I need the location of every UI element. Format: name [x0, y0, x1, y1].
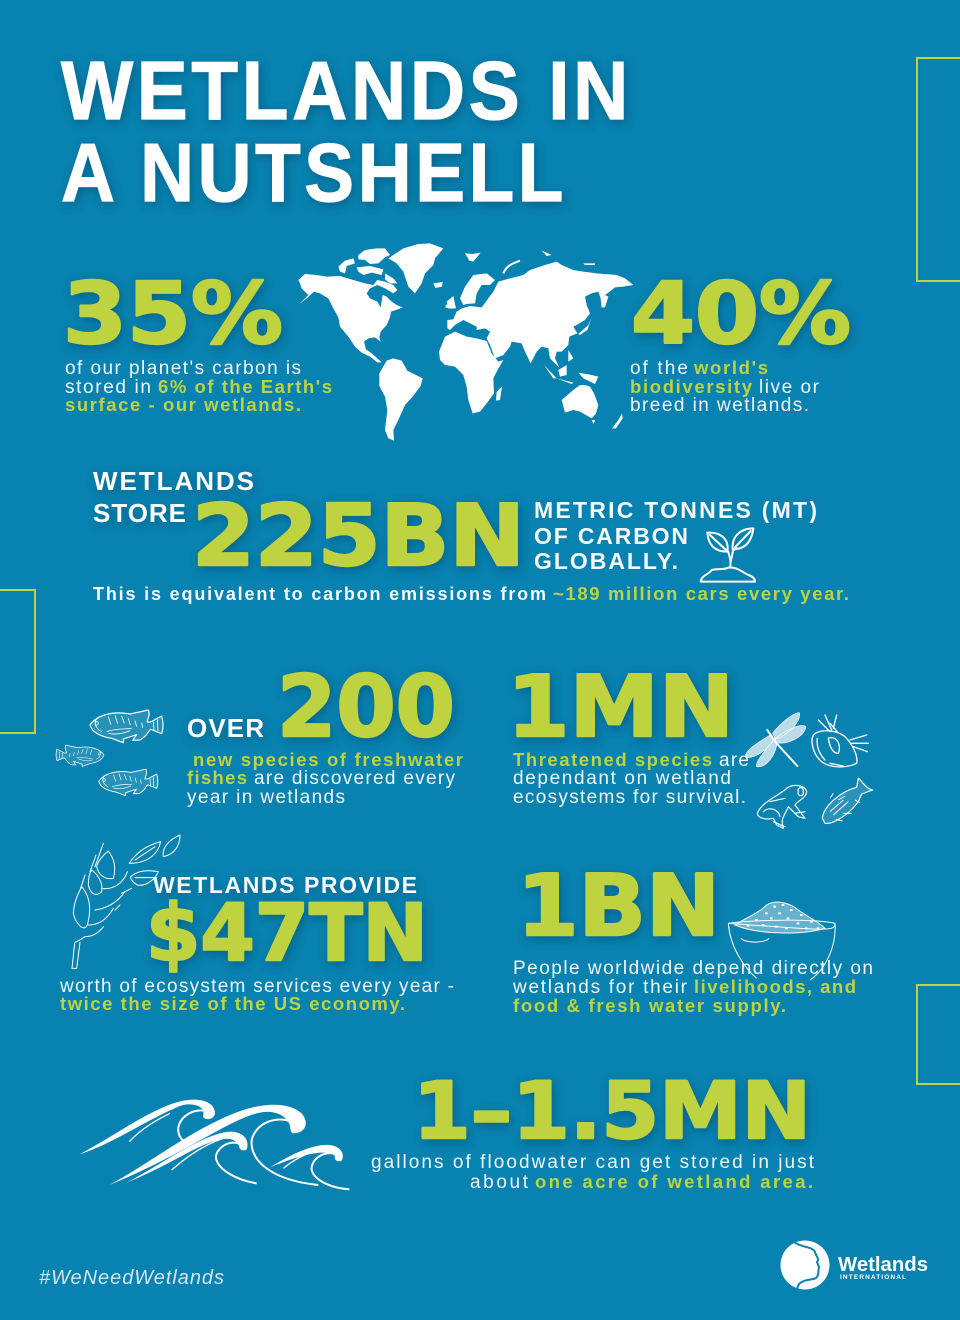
text: floodwater description: about — [470, 1172, 529, 1193]
text: threatened description: Threatened species — [513, 749, 712, 770]
text: people description: livelihoods, and — [694, 976, 856, 997]
text: 35% description: stored in — [65, 377, 151, 398]
stat: 40% biodiversity — [630, 265, 851, 416]
text: metric tonnes: OF CARBON — [534, 523, 688, 549]
icon: crab — [812, 715, 868, 767]
icon: small fish — [822, 778, 873, 823]
number: 1BN: 1BN — [517, 857, 720, 956]
text: services description: twice the size of the US economy. — [60, 993, 405, 1014]
text: equivalence: This is equivalent to carbon emissions from — [93, 584, 546, 604]
text: fish description: new species of freshwater — [193, 749, 463, 770]
text: fish description — [187, 749, 463, 808]
text: 40% description: live or — [759, 377, 820, 398]
number: 35%: 35% — [63, 265, 283, 364]
text: people description — [512, 958, 873, 1016]
text: equivalence — [93, 583, 849, 604]
number: 200: 200 — [277, 658, 455, 757]
icon: dragonfly — [745, 713, 806, 767]
heading: wetlands provide: WETLANDS PROVIDE — [153, 872, 417, 898]
icon: wetland animals — [745, 713, 873, 828]
stat: $47TN ecosystem services — [59, 835, 454, 1014]
text: fish description: are discovered every — [254, 768, 456, 789]
heading: over: OVER — [187, 713, 264, 743]
text: metric tonnes: GLOBALLY. — [534, 548, 678, 574]
heading: wetlands store — [93, 466, 254, 528]
text: threatened description: dependant on wetland — [513, 768, 731, 789]
number: 1MN: 1MN — [507, 658, 734, 757]
number: 40%: 40% — [631, 265, 851, 364]
stat: 1BN people — [512, 857, 873, 1016]
text: people description: wetlands for their — [512, 977, 688, 998]
icon: frog — [757, 785, 807, 828]
text: people description: food & fresh water supply. — [513, 995, 786, 1016]
text: floodwater description: one acre of wetland area. — [535, 1171, 813, 1192]
text: 40% description: biodiversity — [630, 376, 753, 397]
hashtag: #WeNeedWetlands — [39, 1267, 224, 1289]
icon: fishes — [56, 710, 163, 796]
heading: wetlands store: WETLANDS — [93, 466, 254, 496]
title — [61, 44, 632, 219]
decorative frame: lower right — [917, 985, 960, 1084]
text: 35% description: surface - our wetlands. — [65, 394, 301, 415]
text: logo wordmark: Wetlands — [838, 1253, 928, 1276]
text: fish description: fishes — [187, 767, 247, 788]
text: logo wordmark: INTERNATIONAL — [840, 1274, 906, 1281]
number: $47TN: $47TN — [146, 889, 428, 979]
text: 35% description: 6% of the Earth's — [158, 376, 332, 397]
icon: sprout — [701, 528, 755, 582]
text: metric tonnes: METRIC TONNES (MT) — [534, 497, 817, 523]
icon: waves — [79, 1100, 349, 1189]
icon: world map — [298, 243, 633, 441]
text: threatened description — [513, 749, 749, 808]
icon: wheat — [72, 835, 180, 968]
stat: 1–1.5MN floodwater — [79, 1067, 815, 1193]
number: 225BN: 225BN — [192, 487, 525, 586]
text: equivalence: ~189 million cars every year. — [553, 583, 849, 604]
text: metric tonnes — [534, 497, 817, 574]
text: floodwater description — [371, 1152, 815, 1193]
text: people description: People worldwide depend directly on — [513, 958, 873, 979]
text: 40% description: of the — [630, 358, 688, 379]
text: services description — [59, 976, 454, 1014]
logo: Wetlands International — [780, 1240, 928, 1290]
text: 40% description: breed in wetlands. — [630, 395, 809, 416]
text: floodwater description: gallons of floodwater can get stored in just — [371, 1152, 815, 1173]
text: 35% description — [65, 358, 332, 415]
stat: 225BN carbon — [93, 466, 849, 604]
stat: 1MN threatened species — [507, 658, 873, 828]
number: 1–1.5MN: 1–1.5MN — [413, 1067, 811, 1157]
heading: wetlands store: STORE — [93, 498, 186, 528]
title: A NUTSHELL — [61, 126, 567, 219]
stat: over 200 fish species — [56, 658, 463, 808]
text: threatened description: are — [719, 750, 749, 771]
stat: 35% carbon — [63, 265, 332, 415]
text: 35% description: of our planet's carbon is — [65, 358, 301, 379]
icon: bowl of grains — [728, 902, 835, 980]
title: WETLANDS IN — [61, 44, 632, 137]
text: services description: worth of ecosystem services every year - — [59, 976, 454, 997]
icon: logo emblem — [780, 1240, 830, 1290]
decorative frame: middle left — [0, 590, 35, 733]
decorative frame: top right — [917, 58, 960, 281]
text: fish description: year in wetlands — [187, 787, 345, 808]
text: 40% description — [630, 357, 820, 416]
text: 40% description: world's — [693, 357, 768, 378]
text: threatened description: ecosystems for survival. — [513, 787, 746, 808]
